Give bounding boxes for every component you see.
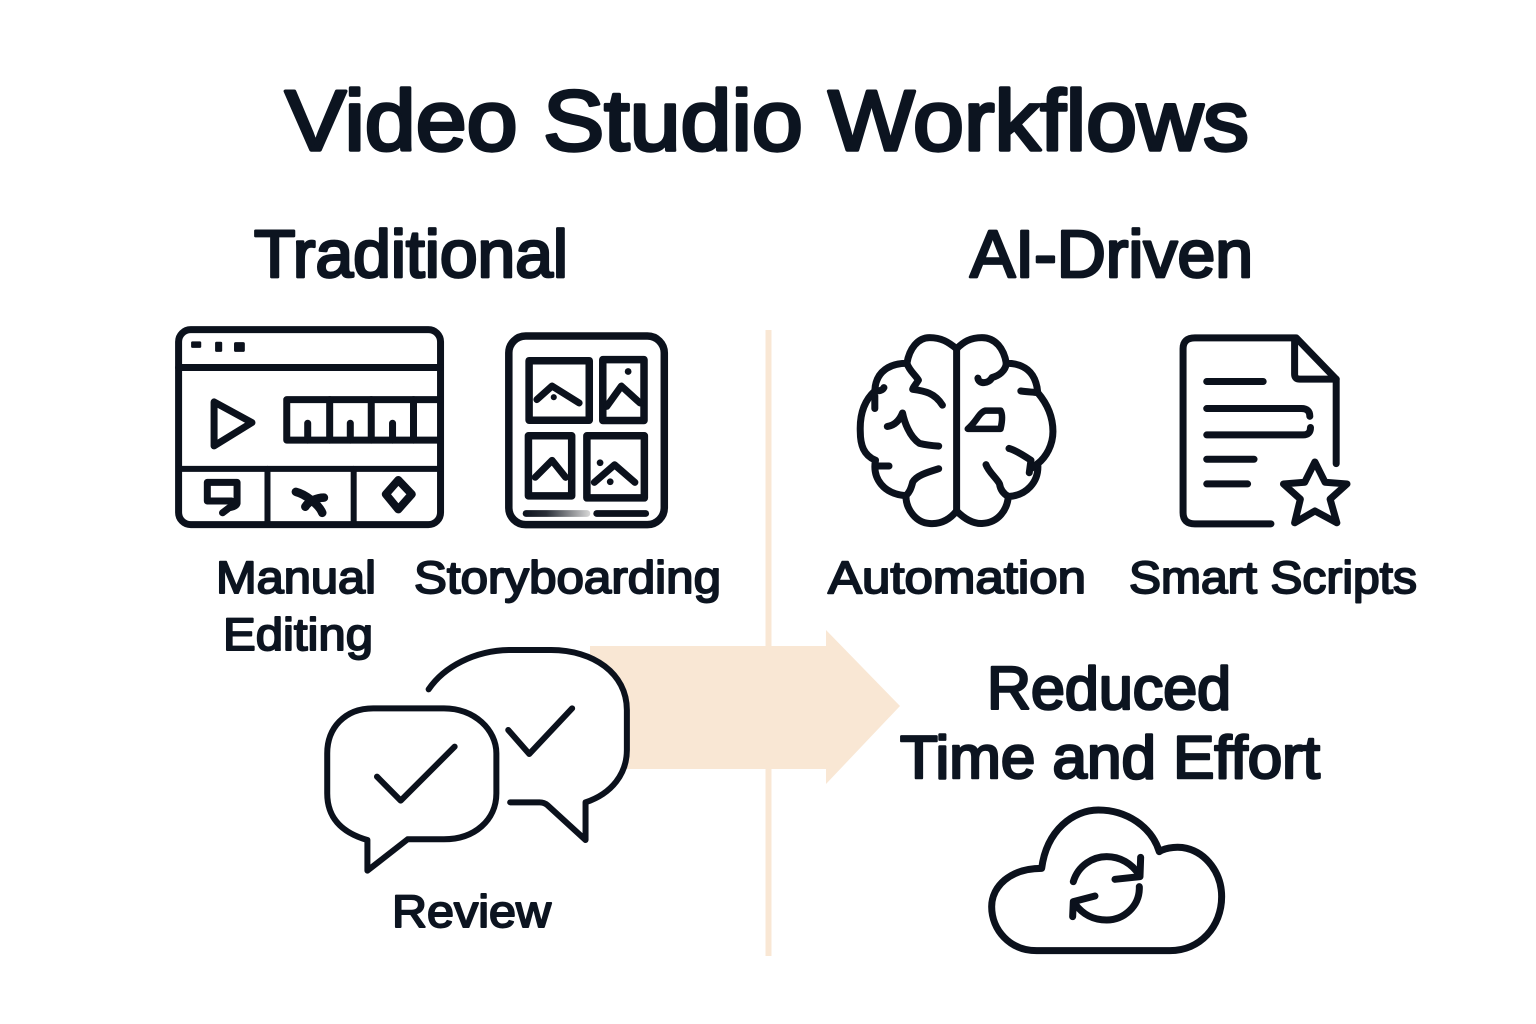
heading: traditional: Traditional [254, 217, 568, 292]
label: manual editing: Manual [216, 552, 376, 603]
icon: editor window [179, 330, 441, 525]
arrow [590, 630, 900, 784]
heading: reduced time and effort [900, 655, 1320, 791]
heading: reduced time and effort: Time and Effort [900, 724, 1320, 791]
icon: storyboard [509, 336, 664, 525]
label: manual editing: Editing [223, 609, 373, 660]
label: review: Review [392, 886, 552, 937]
label: storyboarding: Storyboarding [414, 552, 721, 603]
icon: brain [860, 338, 1053, 524]
center divider [766, 330, 772, 956]
heading: ai-driven: AI-Driven [970, 217, 1253, 292]
label: automation: Automation [828, 552, 1086, 603]
icon: script document with star [1183, 338, 1347, 524]
heading: reduced time and effort: Reduced [987, 655, 1231, 722]
label: smart scripts: Smart Scripts [1129, 552, 1417, 603]
panel: ai-driven [828, 217, 1417, 951]
title: Video Studio Workflows [285, 74, 1249, 169]
icon: cloud sync [992, 810, 1222, 951]
label: manual editing [216, 552, 376, 660]
panel: traditional [179, 217, 721, 937]
icon: review speech bubbles [327, 650, 627, 871]
